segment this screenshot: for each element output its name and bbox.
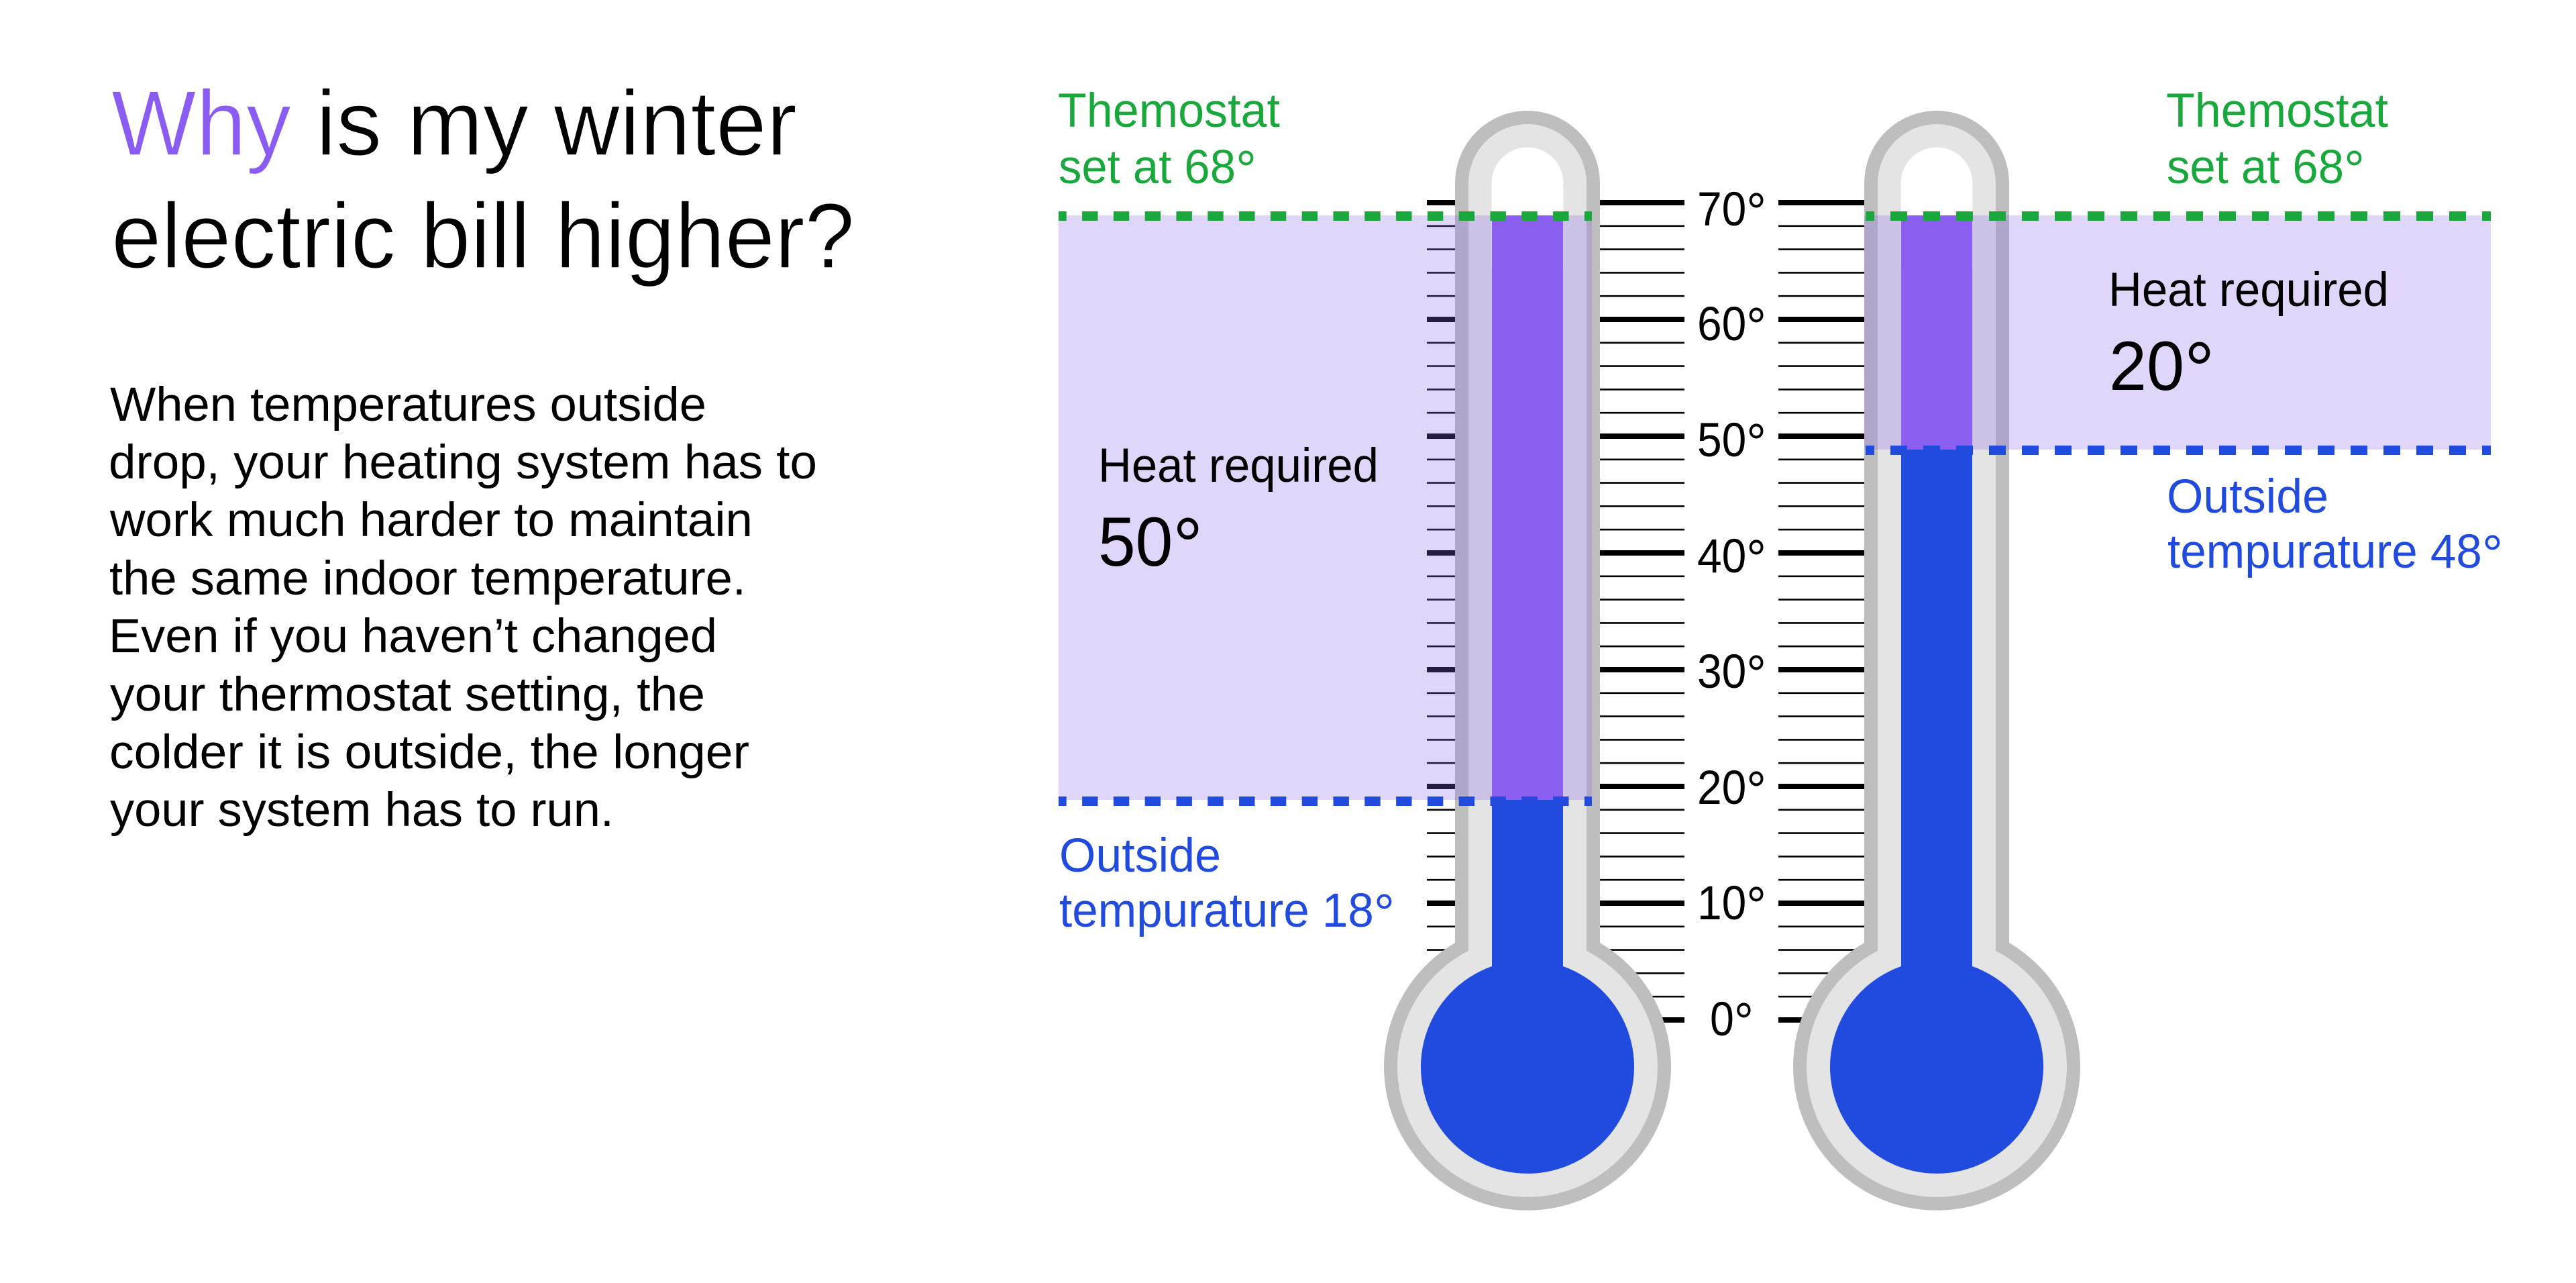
label: outside temperature, left <box>1059 829 1395 943</box>
label: outside temperature, left: ° <box>1374 883 1395 943</box>
label: outside temperature, left: Outside <box>1059 829 1221 882</box>
callout: heat required 50: ° <box>1173 502 1203 589</box>
label: outside temperature, right: Outside <box>2167 470 2328 523</box>
purple liquid <box>1901 215 1972 450</box>
scale labels: ° <box>1746 760 1766 820</box>
scale labels: 10 <box>1697 877 1750 930</box>
title: is my winter <box>316 72 797 175</box>
title <box>111 72 855 288</box>
callout: heat required 20: 20 <box>2109 327 2187 405</box>
thermostat line, left <box>1059 211 1592 221</box>
thermometer glass <box>1397 124 1658 1197</box>
body text: When temperatures outside <box>110 378 706 431</box>
body text: your system has to run. <box>110 784 614 837</box>
scale labels: 0 <box>1710 993 1736 1046</box>
outside temperature line, left <box>1059 797 1592 806</box>
callout: heat required 20: ° <box>2184 326 2214 413</box>
callout: heat required 50: Heat required <box>1098 440 1379 493</box>
label: thermostat, left: ° <box>1236 140 1256 199</box>
scale labels: 20 <box>1697 762 1750 815</box>
label: thermostat, right: Themostat <box>2166 85 2388 138</box>
scale labels: ° <box>1746 182 1766 242</box>
panel: heat required, left <box>1059 215 1592 800</box>
body text: the same indoor temperature. <box>109 552 746 605</box>
body text <box>109 378 817 837</box>
body text: your thermostat setting, the <box>110 668 705 721</box>
scale labels <box>1697 182 1766 1051</box>
empty tube <box>1901 148 1972 268</box>
purple liquid <box>1492 215 1563 800</box>
scale ticks: left thermometer <box>1427 203 1684 1020</box>
scale ticks: right thermometer <box>1778 203 1912 1020</box>
label: thermostat, right: set at 68 <box>2167 141 2349 194</box>
thermometer casing <box>1793 111 2080 1211</box>
callout: heat required 50 <box>1098 440 1379 589</box>
label: thermostat, left: set at 68 <box>1059 141 1241 194</box>
thermostat line, right <box>1866 211 2491 221</box>
thermometer glass <box>1807 124 2067 1197</box>
thermometer: left <box>1384 111 1671 1211</box>
callout: heat required 50: 50 <box>1098 503 1176 581</box>
label: outside temperature, left: tempurature 18 <box>1059 884 1383 937</box>
callout: heat required 20: Heat required <box>2108 264 2389 317</box>
callout: heat required 20 <box>2108 264 2389 413</box>
body text: Even if you haven’t changed <box>109 610 717 663</box>
scale labels: 50 <box>1697 414 1750 467</box>
scale labels: ° <box>1746 529 1766 588</box>
blue liquid and bulb <box>1421 800 1634 1174</box>
outside temperature line, right <box>1866 446 2491 455</box>
label: outside temperature, right <box>2167 470 2503 584</box>
panel: heat required, right <box>1864 215 2491 450</box>
scale labels: 60 <box>1697 298 1750 351</box>
body text: work much harder to maintain <box>109 494 753 547</box>
label: thermostat, right <box>2166 85 2388 199</box>
title: Why <box>111 72 291 175</box>
scale labels: ° <box>1746 297 1766 356</box>
thermometer: right <box>1793 111 2080 1211</box>
body text: drop, your heating system has to <box>109 436 817 489</box>
scale labels: ° <box>1746 876 1766 935</box>
label: thermostat, left: Themostat <box>1058 85 1280 138</box>
blue liquid and bulb <box>1830 450 2043 1174</box>
scale labels: ° <box>1746 413 1766 472</box>
empty tube <box>1492 148 1563 268</box>
label: outside temperature, right: tempurature 48 <box>2167 525 2491 578</box>
scale labels: ° <box>1746 644 1766 704</box>
scale labels: 40 <box>1697 530 1750 583</box>
thermometer casing <box>1384 111 1671 1211</box>
label: thermostat, left <box>1058 85 1280 199</box>
title: electric bill higher? <box>111 185 855 288</box>
body text: colder it is outside, the longer <box>109 726 749 779</box>
scale labels: ° <box>1734 992 1754 1051</box>
label: outside temperature, right: ° <box>2482 524 2503 584</box>
scale labels: 70 <box>1697 183 1750 236</box>
label: thermostat, right: ° <box>2344 140 2365 199</box>
scale labels: 30 <box>1697 646 1750 699</box>
